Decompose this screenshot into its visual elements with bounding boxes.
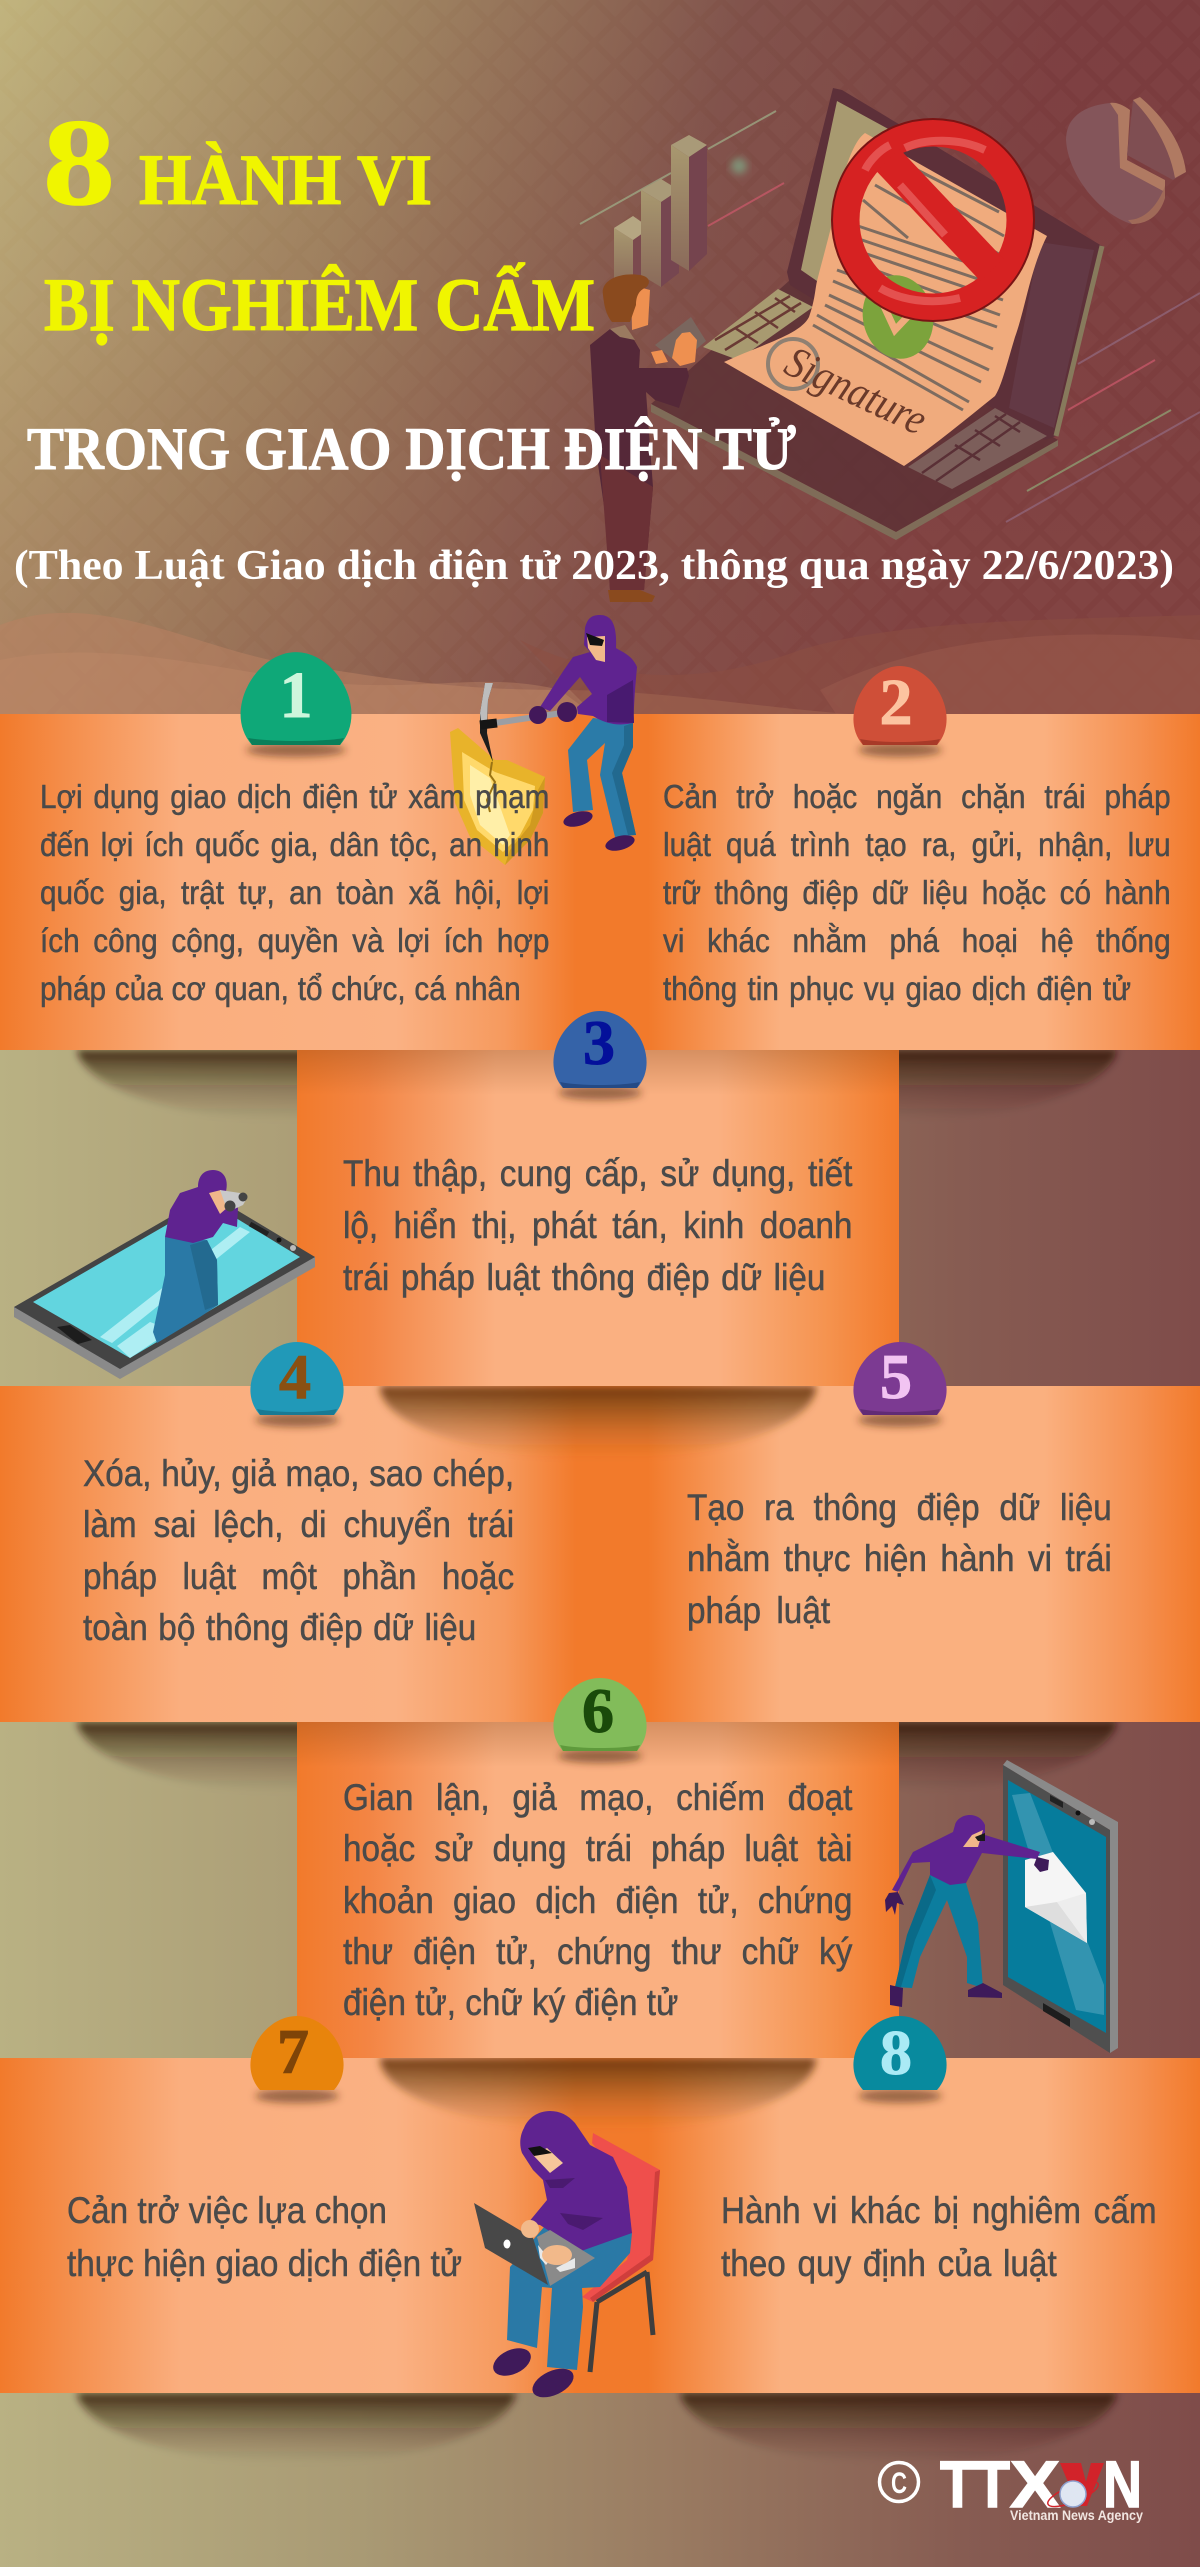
text block: item 2: Cản trở hoặc ngăn chặn trái pháp <box>663 778 1171 815</box>
text block: item 5 <box>687 1487 1112 1631</box>
centre column shadows on bands <box>297 1376 899 2130</box>
badge 6: 6 <box>582 1675 614 1746</box>
title: 8 hành vi <box>43 94 432 231</box>
subtitle: legal source: (Theo Luật Giao dịch điện tử 2023, thông qua ngày 22/6/2023) <box>14 543 1174 589</box>
text block: item 1 <box>40 778 549 1008</box>
text block: item 7: thực hiện giao dịch điện tử <box>67 2243 462 2284</box>
text block: item 6: hoặc sử dụng trái pháp luật tài <box>343 1828 852 1869</box>
illustration: signed document: Signature <box>778 337 934 444</box>
text block: item 8: Hành vi khác bị nghiêm cấm <box>721 2190 1157 2231</box>
text block: item 7 <box>67 2190 462 2284</box>
text block: item 7: Cản trở việc lựa chọn <box>67 2190 387 2231</box>
text block: item 1: pháp của cơ quan, tổ chức, cá nhân <box>40 970 521 1007</box>
panel: band items 7 and 8 <box>0 2058 1200 2393</box>
illustration: prohibition sign <box>832 119 1034 321</box>
badge 1 <box>241 652 351 757</box>
illustration: businessman <box>590 274 706 602</box>
logo: TTXVN: Vietnam News Agency <box>1010 2507 1143 2523</box>
badge 2 <box>853 666 947 757</box>
text block: item 8 <box>721 2190 1157 2284</box>
text block: item 2: trữ thông điệp dữ liệu hoặc có hành <box>663 874 1171 911</box>
badge 2: 2 <box>880 666 912 739</box>
band shadows on background <box>77 1050 1117 2463</box>
text block: item 6: điện tử, chữ ký điện tử <box>343 1982 678 2023</box>
title: bị nghiêm cấm: BỊ NGHIÊM CẤM <box>44 264 595 347</box>
text block: item 3: Thu thập, cung cấp, sử dụng, tiết <box>343 1153 852 1194</box>
badge 7 <box>250 2016 344 2103</box>
text block: item 1: quốc gia, trật tự, an toàn xã hội, lợi <box>40 874 549 911</box>
icon: hacker with laptop on chair <box>474 2111 660 2403</box>
text block: item 1: đến lợi ích quốc gia, dân tộc, an ninh <box>40 826 549 863</box>
text block: item 4: làm sai lệch, di chuyển trái <box>83 1504 514 1545</box>
badge 7: 7 <box>277 2016 309 2087</box>
illustration: pie chart <box>1066 97 1186 224</box>
badge 5: 5 <box>880 1341 912 1412</box>
logo: TTXVN <box>880 2447 1143 2523</box>
illustration: laptop <box>651 88 1102 540</box>
badge 4 <box>250 1341 344 1427</box>
text block: item 5: nhằm thực hiện hành vi trái <box>687 1538 1112 1579</box>
icon: hacker stealing envelope from tablet <box>885 1760 1118 2053</box>
badge 3: 3 <box>583 1007 615 1078</box>
badge 8: 8 <box>880 2017 912 2088</box>
text block: item 2: luật quá trình tạo ra, gửi, nhận, lưu <box>663 826 1171 863</box>
badge 5 <box>853 1341 947 1427</box>
title: trong giao dịch điện tử: TRONG GIAO DỊCH ĐIỆN TỬ <box>27 416 796 482</box>
text block: item 1: Lợi dụng giao dịch điện tử xâm phạm <box>40 778 549 815</box>
logo: TTXVN: C <box>891 2467 907 2500</box>
title: 8 hành vi: 8 <box>43 94 115 231</box>
logo: TTXVN: T <box>975 2447 1010 2521</box>
wavy hills behind first band <box>0 613 1200 720</box>
icon: hacker spying from a phone <box>14 1170 315 1379</box>
panel: centre column 6 <box>297 1722 899 2058</box>
badge 6 <box>553 1675 647 1763</box>
badge 1: 1 <box>280 659 312 732</box>
text block: item 6 <box>343 1777 853 2023</box>
text block: item 3 <box>343 1153 852 1298</box>
text block: item 2: vi khác nhằm phá hoại hệ thống <box>663 922 1171 959</box>
illustration: bar chart <box>614 135 707 290</box>
text block: item 4: Xóa, hủy, giả mạo, sao chép, <box>83 1453 514 1494</box>
text block: item 5: pháp luật <box>687 1590 830 1631</box>
text block: item 6: khoản giao dịch điện tử, chứng <box>343 1880 852 1921</box>
text block: item 1: ích công cộng, quyền và lợi ích hợp <box>40 922 549 959</box>
text block: item 3: trái pháp luật thông điệp dữ liệu <box>343 1257 825 1298</box>
panel: band items 4 and 5 <box>0 1386 1200 1722</box>
text block: item 2 <box>662 778 1171 1008</box>
text block: item 4 <box>83 1453 514 1648</box>
title: 8 hành vi: HÀNH VI <box>139 140 432 220</box>
icon: hacker breaking shield with pickaxe <box>450 615 637 865</box>
text block: item 5: Tạo ra thông điệp dữ liệu <box>687 1487 1112 1528</box>
badge 8 <box>853 2016 947 2103</box>
logo: TTXVN: N <box>1103 2447 1142 2521</box>
panel: centre column 3 <box>297 1050 899 1386</box>
logo: TTXVN: X <box>1010 2447 1060 2521</box>
text block: item 6: Gian lận, giả mạo, chiếm đoạt <box>343 1777 852 1818</box>
text block: item 2: thông tin phục vụ giao dịch điện tử <box>663 970 1131 1007</box>
text block: item 8: theo quy định của luật <box>721 2243 1057 2284</box>
text block: item 4: toàn bộ thông điệp dữ liệu <box>83 1607 476 1648</box>
badge 3 <box>553 1007 647 1100</box>
logo: TTXVN: T <box>940 2447 975 2521</box>
text block: item 3: lộ, hiển thị, phát tán, kinh doanh <box>343 1205 852 1246</box>
panel: band items 1 and 2 <box>0 714 1200 1050</box>
text block: item 6: thư điện tử, chứng thư chữ ký <box>343 1931 852 1972</box>
text block: item 4: pháp luật một phần hoặc <box>83 1556 514 1597</box>
illustration: signed document <box>724 133 1047 466</box>
badge 4: 4 <box>279 1341 311 1412</box>
